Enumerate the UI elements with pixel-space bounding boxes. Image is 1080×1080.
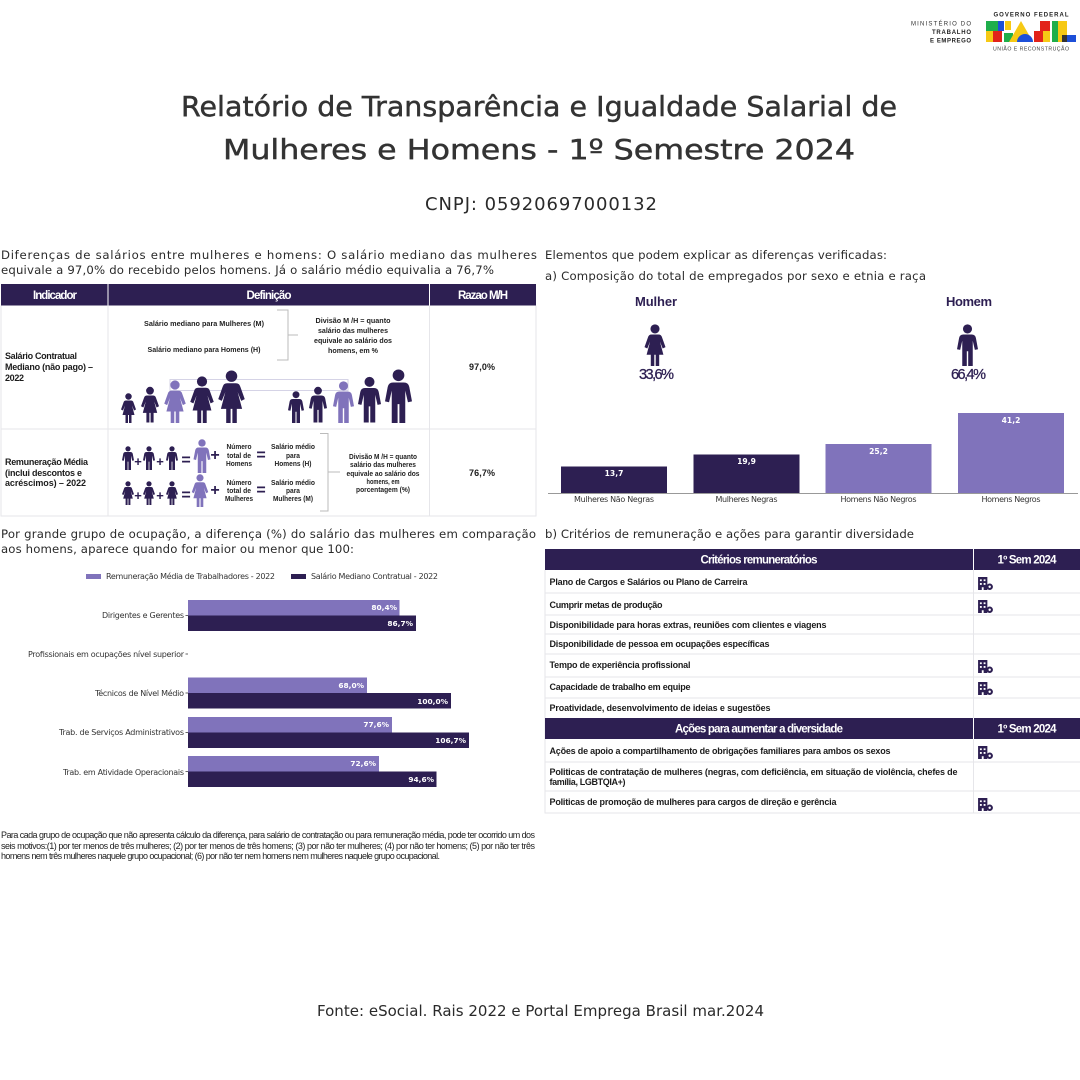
- column chart: sex and race: Mulheres Negras: [716, 495, 778, 504]
- stat: Homem 66,4%: 66,4%: [951, 367, 986, 383]
- panel: criteria table: [545, 549, 1080, 813]
- footnote: homens nem três mulheres naquele grupo ocupacional; (6) por não ter nem homens nem mulheres naquele grupo ocupacional.: [1, 851, 440, 861]
- title: Mulheres e Homens - 1º Semestre 2024: [223, 133, 855, 166]
- text block: salary differences intro: [1, 248, 537, 277]
- icons: women average formula: =: [181, 487, 191, 504]
- row: Salário Contratual Mediano: Divisão M /H = quanto: [316, 316, 391, 325]
- footnote: [1, 830, 536, 861]
- column chart: sex and race: Mulheres Não Negras: [574, 495, 654, 504]
- icons: men average formula: +: [210, 447, 220, 464]
- heading: criteria and actions: b) Critérios de remuneração e ações para garantir diversidade: [545, 527, 914, 541]
- column chart: sex and race: [548, 413, 1078, 504]
- table header: actions: Ações para aumentar a diversidade: [675, 724, 843, 736]
- legend: [86, 571, 438, 581]
- group: Técnicos de Nível Médio: 68,0%: [338, 681, 365, 690]
- row: Remuneração Média: Número: [226, 478, 252, 487]
- icons: men average formula: =: [256, 447, 266, 464]
- row: Salário Contratual Mediano: [5, 310, 495, 423]
- column chart: sex and race: 25,2: [869, 447, 888, 456]
- icons: women median row: [121, 370, 245, 423]
- row: Remuneração Média: Número: [226, 442, 252, 451]
- logo: Ministério do Trabalho e Emprego: TRABALHO: [932, 30, 971, 36]
- stat: Homem 66,4%: Homem: [946, 294, 992, 309]
- panel: criteria table: Politicas de contratação de mulheres (negras, com deficiência, em situação de violência, chefes de: [550, 767, 958, 777]
- source note: Fonte: eSocial. Rais 2022 e Portal Emprega Brasil mar.2024: [317, 1002, 764, 1020]
- footnote: seis motivos:(1) por ter menos de três mulheres; (2) por ter menos de três homens; (3) por não ter mulheres; (4) por não ter homens; (5) por não ter três: [1, 841, 536, 851]
- table header: Definição: [246, 290, 292, 302]
- row: Remuneração Média: total de: [227, 486, 251, 495]
- row: Salário Contratual Mediano: Salário mediano para Mulheres (M): [144, 319, 265, 328]
- panel: criteria table: Capacidade de trabalho em equipe: [550, 682, 690, 692]
- row: Salário Contratual Mediano: Salário mediano para Homens (H): [148, 345, 261, 354]
- panel: criteria table: família, LGBTQIA+): [550, 777, 626, 787]
- group: Técnicos de Nível Médio: [94, 678, 451, 708]
- icons: women average formula: +: [134, 488, 142, 503]
- icons: company adopts criterion: [978, 577, 993, 811]
- text block: occupation group intro: Por grande grupo de ocupação, a diferença (%) do salário das mulheres em comparação: [1, 527, 536, 541]
- group: Trab. de Serviços Administrativos: Trab. de Serviços Administrativos: [58, 728, 184, 737]
- row: Salário Contratual Mediano: equivale ao salário dos: [314, 336, 392, 345]
- logo: Governo Federal Brasil: [986, 12, 1076, 52]
- group: Dirigentes e Gerentes: 80,4%: [371, 603, 398, 612]
- icons: men median row: [288, 369, 412, 423]
- group: Trab. de Serviços Administrativos: 77,6%: [363, 720, 390, 729]
- panel: criteria table: Ações de apoio a compartilhamento de obrigações familiares para ambos os sexos: [550, 746, 890, 756]
- text block: salary differences intro: Diferenças de salários entre mulheres e homens: O salário mediano das mulheres: [1, 248, 537, 262]
- logo: Governo Federal Brasil: GOVERNO FEDERAL: [994, 12, 1069, 18]
- footnote: Para cada grupo de ocupação que não apresenta cálculo da diferença, para salário de contratação ou para remuneração média, pode ter ocorrido um dos: [1, 830, 536, 840]
- row: Remuneração Média: para: [286, 451, 301, 460]
- column chart: sex and race: Homens Negros: [982, 495, 1040, 504]
- group: Técnicos de Nível Médio: Técnicos de Nível Médio: [94, 688, 184, 698]
- group: Dirigentes e Gerentes: 86,7%: [387, 619, 414, 628]
- group: Trab. em Atividade Operacionais: Trab. em Atividade Operacionais: [62, 768, 184, 777]
- text block: salary differences intro: equivale a 97,0% do recebido pelos homens. Já o salário médio equivalia a 76,7%: [1, 263, 494, 277]
- text block: occupation group intro: aos homens, aparece quando for maior ou menor que 100:: [1, 542, 354, 556]
- stat: Mulher 33,6%: 33,6%: [639, 367, 674, 383]
- table header: criteria: [545, 549, 1080, 570]
- panel: criteria table: Disponibilidade de pessoa em ocupações específicas: [550, 639, 770, 649]
- row: Remuneração Média: [5, 434, 495, 511]
- table header: [1, 284, 536, 306]
- group: Trab. de Serviços Administrativos: 106,7%: [435, 736, 467, 745]
- group: Trab. de Serviços Administrativos: [58, 717, 469, 748]
- row: Remuneração Média: Mulheres: [225, 494, 253, 503]
- icons: women average formula: +: [156, 488, 164, 503]
- icons: women average formula: [122, 474, 266, 507]
- legend: Remuneração Média de Trabalhadores - 2022: [106, 571, 275, 581]
- table header: Razao M/H: [458, 290, 508, 302]
- stat: Mulher 33,6%: [635, 294, 677, 383]
- bar chart: occupation groups: [28, 571, 469, 787]
- title: Relatório de Transparência e Igualdade Salarial de: [181, 90, 897, 123]
- row: Salário Contratual Mediano: Mediano (não pago) –: [5, 362, 93, 372]
- row: Remuneração Média: equivale ao salário dos: [346, 469, 420, 478]
- logo: Ministério do Trabalho e Emprego: E EMPREGO: [930, 38, 971, 44]
- group: Profissionais em ocupações nível superior: Profissionais em ocupações nível superior: [28, 650, 185, 659]
- icons: women average formula: +: [210, 482, 220, 499]
- panel: criteria table: Politicas de promoção de mulheres para cargos de direção e gerência: [550, 797, 837, 807]
- row: Remuneração Média: Salário médio: [271, 478, 315, 487]
- row: Remuneração Média: Mulheres (M): [273, 494, 313, 503]
- column chart: sex and race: Homens Não Negros: [840, 495, 916, 504]
- row: Salário Contratual Mediano: homens, em %: [328, 346, 378, 355]
- subtitle: CNPJ: CNPJ: 05920697000132: [425, 194, 657, 215]
- panel: indicators table: [1, 284, 536, 516]
- icons: men average formula: +: [134, 454, 142, 469]
- column chart: sex and race: 19,9: [737, 457, 756, 466]
- row: Remuneração Média: 76,7%: [469, 468, 495, 478]
- row: Remuneração Média: Homens (H): [274, 459, 312, 468]
- row: Remuneração Média: total de: [227, 451, 251, 460]
- panel: criteria table: Cumprir metas de produção: [550, 600, 663, 610]
- logo: Ministério do Trabalho e Emprego: [911, 20, 971, 44]
- group: Dirigentes e Gerentes: [102, 600, 416, 631]
- column chart: sex and race: 41,2: [1002, 416, 1020, 425]
- row: Remuneração Média: (inclui descontos e: [5, 468, 82, 478]
- group: Trab. em Atividade Operacionais: 72,6%: [350, 759, 377, 768]
- title: [181, 90, 897, 166]
- panel: criteria table: Disponibilidade para horas extras, reuniões com clientes e viagens: [550, 620, 826, 630]
- panel: criteria table: Tempo de experiência profissional: [550, 660, 690, 670]
- row: Salário Contratual Mediano: 97,0%: [469, 362, 495, 372]
- row: Remuneração Média: Divisão M /H = quanto: [349, 452, 417, 461]
- group: Trab. em Atividade Operacionais: [62, 756, 436, 787]
- row: Remuneração Média: Homens: [226, 459, 252, 468]
- icons: women average formula: =: [256, 482, 266, 499]
- heading: explanatory elements: Elementos que podem explicar as diferenças verificadas:: [545, 248, 887, 262]
- stat: Mulher 33,6%: Mulher: [635, 294, 677, 309]
- table header: actions: 1º Sem 2024: [998, 724, 1057, 736]
- logo: Governo Federal Brasil: UNIÃO E RECONSTRUÇÃO: [993, 46, 1069, 52]
- icons: men average formula: =: [181, 452, 191, 469]
- group: Técnicos de Nível Médio: 100,0%: [417, 697, 449, 706]
- row: Salário Contratual Mediano: Salário Contratual: [5, 351, 77, 361]
- table header: criteria: 1º Sem 2024: [998, 554, 1057, 566]
- stat: Homem 66,4%: [946, 294, 992, 383]
- row: Remuneração Média: para: [286, 486, 301, 495]
- row: Remuneração Média: homens, em: [366, 477, 400, 486]
- icons: men average formula: +: [156, 454, 164, 469]
- group: Trab. em Atividade Operacionais: 94,6%: [408, 775, 435, 784]
- row: Remuneração Média: Remuneração Média: [5, 457, 89, 467]
- logo: Ministério do Trabalho e Emprego: MINISTÉRIO DO: [911, 20, 971, 28]
- table header: criteria: Critérios remuneratórios: [700, 554, 818, 566]
- text block: occupation group intro: [1, 527, 536, 556]
- row: Remuneração Média: acréscimos) – 2022: [5, 478, 86, 488]
- row: Salário Contratual Mediano: salário das mulheres: [318, 326, 388, 335]
- row: Salário Contratual Mediano: 2022: [5, 373, 24, 383]
- row: Remuneração Média: porcentagem (%): [356, 485, 410, 494]
- row: Remuneração Média: Salário médio: [271, 442, 315, 451]
- legend: Salário Mediano Contratual - 2022: [311, 572, 438, 581]
- column chart: sex and race: 13,7: [605, 469, 623, 478]
- heading: composition: a) Composição do total de empregados por sexo e etnia e raça: [545, 269, 926, 283]
- table header: actions: [545, 718, 1080, 739]
- panel: criteria table: Plano de Cargos e Salários ou Plano de Carreira: [550, 577, 748, 587]
- group: Dirigentes e Gerentes: Dirigentes e Gerentes: [102, 611, 184, 620]
- table header: Indicador: [33, 290, 78, 302]
- row: Remuneração Média: salário das mulheres: [350, 460, 416, 469]
- panel: criteria table: Proatividade, desenvolvimento de ideias e sugestões: [550, 703, 770, 713]
- icons: men average formula: [122, 439, 266, 473]
